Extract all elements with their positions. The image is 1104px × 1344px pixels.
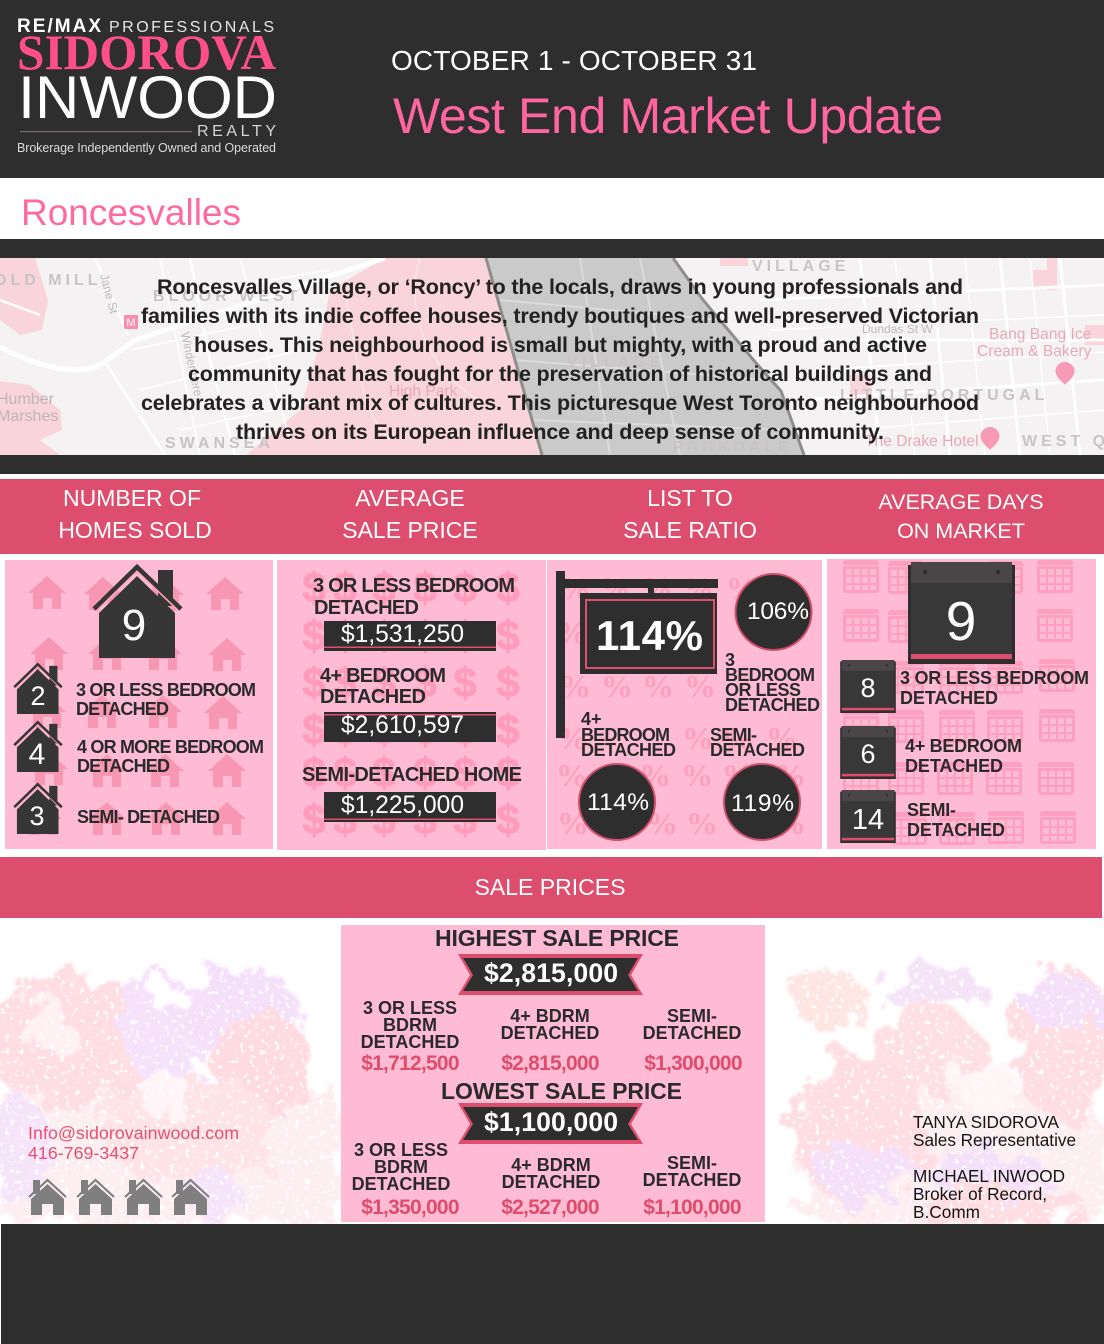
icon: restaurant pin (980, 427, 1000, 450)
stat: 4+ bedroom price: $2,610,597 (341, 712, 464, 739)
date range: OCTOBER 1 - OCTOBER 31 (391, 45, 757, 76)
dark strip above map (0, 239, 1104, 258)
lowest: 4+ bdrm detached: $2,527,000 (501, 1196, 599, 1219)
panel: list to sale ratio: % (559, 668, 591, 704)
contact details (28, 1123, 239, 1163)
lowest: 4+ bdrm detached: DETACHED (502, 1172, 600, 1192)
panel: average sale price: $ (413, 659, 437, 706)
panel: list to sale ratio: % (729, 805, 761, 841)
stat: 119% semi-detached (710, 725, 805, 840)
footer band (1, 1224, 1104, 1344)
highest: 3 or less bdrm detached (361, 998, 459, 1075)
panel: average sale price: $ (496, 706, 520, 753)
logo: Sidorova Inwood Realty: PROFESSIONALS (109, 19, 274, 36)
agent names: TANYA SIDOROVA (913, 1112, 1060, 1132)
stat: 3 or less bedroom days: 8 (860, 673, 876, 703)
highest: 3 or less bdrm detached: DETACHED (361, 1032, 459, 1052)
stat: 4+ bedroom price: 4+ BEDROOM (320, 665, 446, 687)
panel: average sale price: $ (453, 706, 477, 753)
panel: average sale price: $ (372, 749, 396, 796)
sale prices banner (0, 857, 1102, 918)
panel: list to sale ratio: % (646, 805, 678, 841)
stat: 4+ bedroom days: DETACHED (905, 756, 1003, 776)
panel: list to sale ratio: % (722, 757, 754, 793)
stat: 3 or less bedroom detached: 2 (30, 681, 46, 711)
panel: average sale price: $ (453, 564, 477, 611)
highest: semi-detached (643, 1006, 742, 1075)
heading: highest sale price: HIGHEST SALE PRICE (435, 925, 679, 951)
stat: 4+ bedroom days: 4+ BEDROOM (905, 736, 1022, 756)
dark strip below map (0, 455, 1104, 474)
ribbon: lowest price (458, 1103, 643, 1144)
panel: list to sale ratio: % (601, 668, 633, 704)
description text (141, 275, 979, 444)
stat: semi-detached: 3 (29, 801, 45, 831)
lowest: 3 or less bdrm detached: $1,350,000 (361, 1196, 459, 1219)
lowest: semi-detached: SEMI- (667, 1153, 717, 1173)
panel: average sale price: $ (372, 612, 396, 659)
description text: celebrates a vibrant mix of cultures. This picturesque West Toronto neighbourhood (141, 391, 979, 415)
logo: Sidorova Inwood Realty: REALTY (197, 123, 276, 140)
icon: hanging sign with overall ratio: 114% (596, 612, 703, 659)
highest: 4+ bdrm detached: 4+ BDRM (510, 1006, 590, 1026)
panel: list to sale ratio: % (641, 570, 673, 606)
stat: 4+ bedroom days: 6 (860, 739, 876, 769)
stat column headers: AVERAGE (355, 485, 465, 511)
stat: 3 or less bedroom price (313, 575, 515, 651)
map labels: VILLAGE (567, 354, 664, 371)
agent names (913, 1112, 1076, 1222)
lowest: semi-detached (643, 1153, 741, 1219)
stat: 3 or less bedroom days (840, 660, 1089, 713)
icon: calendar total 9 (908, 562, 1015, 664)
stat: 3 or less bedroom price: $1,531,250 (341, 621, 464, 648)
lowest: 3 or less bdrm detached: 3 OR LESS (354, 1140, 448, 1160)
stat column headers: ON MARKET (897, 519, 1025, 543)
stat: 4 or more bedroom detached: DETACHED (77, 756, 170, 776)
icon row: four houses (29, 1180, 209, 1215)
panel: average sale price: $ (302, 659, 326, 706)
panel: list to sale ratio: % (774, 757, 806, 793)
map labels: LITTLE PORTUGAL (840, 387, 1048, 404)
panel: list to sale ratio: % (599, 570, 631, 606)
map labels: Bang Bang Ice (989, 326, 1091, 343)
map labels: High Park (389, 383, 458, 400)
panel: list to sale ratio: % (722, 720, 754, 756)
stat: semi-detached (14, 784, 220, 834)
panel: average sale price: $ (372, 796, 396, 843)
sale prices banner: SALE PRICES (475, 874, 625, 900)
panel: average sale price: $ (302, 796, 326, 843)
contact details: 416-769-3437 (28, 1143, 139, 1163)
stat: 3 or less bedroom price: DETACHED (314, 597, 419, 619)
panel: average sale price: $ (413, 564, 437, 611)
panel: average sale price: $ (372, 706, 396, 753)
panel: list to sale ratio: % (726, 570, 758, 606)
panel: average sale price: $ (333, 749, 357, 796)
stat: 114% 4+ bedroom: 114% (587, 789, 649, 816)
icon: subway marker: M (126, 317, 136, 329)
icon: subway marker (124, 315, 138, 329)
main title: West End Market Update (393, 88, 943, 144)
map labels: Dundas St W (862, 322, 933, 336)
logo: Sidorova Inwood Realty: Brokerage Independently Owned and Operated (17, 141, 276, 155)
panel: list to sale ratio: % (642, 668, 674, 704)
icon: restaurant pin (1056, 362, 1074, 384)
lowest: 4+ bdrm detached (501, 1155, 600, 1219)
panel: map with neighbourhood description (0, 258, 1104, 456)
panel: average sale price: $ (453, 659, 477, 706)
lowest: 4+ bdrm detached: 4+ BDRM (511, 1155, 591, 1175)
stat: 114% 4+ bedroom: BEDROOM (581, 725, 670, 745)
agent names: Sales Representative (913, 1130, 1076, 1150)
highest: 3 or less bdrm detached: $1,712,500 (361, 1052, 459, 1075)
stat column headers: SALE RATIO (623, 517, 757, 543)
icon: house total 9 (94, 567, 181, 658)
panel: list to sale ratio: % (556, 614, 588, 650)
panel: list to sale ratio: % (597, 757, 629, 793)
lowest: 3 or less bdrm detached: DETACHED (352, 1174, 450, 1194)
stat: semi-detached days (840, 790, 1005, 843)
panel: average sale price: $ (453, 796, 477, 843)
panel: average sale price: $ (302, 749, 326, 796)
stat: 106% 3 bedroom or less: 106% (747, 598, 809, 625)
lowest: 3 or less bdrm detached (352, 1140, 459, 1219)
lowest: semi-detached: $1,100,000 (643, 1196, 741, 1219)
logo: Sidorova Inwood Realty (17, 16, 277, 155)
panel: average sale price: $ (302, 612, 326, 659)
paint splatter background left (0, 968, 340, 1224)
stat: semi-detached price (302, 764, 522, 822)
highest: 4+ bdrm detached (501, 1006, 599, 1075)
stat: semi-detached price: $1,225,000 (341, 792, 464, 819)
highest: semi-detached: $1,300,000 (644, 1052, 742, 1075)
panel: list to sale ratio: % (639, 757, 671, 793)
stat: 3 or less bedroom price: 3 OR LESS BEDROOM (313, 575, 515, 597)
stat: 114% 4+ bedroom: DETACHED (581, 740, 676, 760)
stat column headers: AVERAGE DAYS (878, 490, 1044, 514)
panel: list to sale ratio: % (766, 720, 798, 756)
panel: list to sale ratio (547, 560, 822, 849)
stat: 119% semi-detached: DETACHED (710, 740, 805, 760)
panel: average sale price: $ (333, 659, 357, 706)
panel: highest and lowest sale prices (341, 925, 765, 1222)
agent names: MICHAEL INWOOD (913, 1166, 1065, 1186)
map labels: Cream & Bakery (977, 343, 1092, 360)
panel: average sale price: $ (496, 564, 520, 611)
panel: list to sale ratio: % (681, 757, 713, 793)
stat: semi-detached days: DETACHED (907, 820, 1005, 840)
icon: hanging sign with overall ratio (556, 571, 718, 738)
description text: families with its indie coffee houses, trendy boutiques and well-preserved Victorian (141, 304, 979, 328)
stat: 106% 3 bedroom or less: 3 (725, 650, 735, 670)
stat: 106% 3 bedroom or less: OR LESS (725, 680, 801, 700)
logo: Sidorova Inwood Realty: INWOOD (18, 64, 277, 131)
panel: average sale price (277, 560, 546, 850)
stat: 106% 3 bedroom or less (725, 574, 820, 715)
stat column headers (0, 479, 1104, 554)
panel: average sale price: $ (413, 612, 437, 659)
stat: 4 or more bedroom detached (14, 722, 264, 776)
stat: semi-detached: SEMI- DETACHED (77, 807, 220, 827)
panel: average sale price: $ (496, 612, 520, 659)
stat: 114% 4+ bedroom (579, 709, 676, 840)
description text: Roncesvalles Village, or ‘Roncy’ to the locals, draws in young professionals and (157, 275, 963, 299)
icon: house total 9: 9 (122, 601, 146, 650)
map labels: Windermere (178, 331, 205, 398)
description text: community that has fought for the preservation of historical buildings and (188, 362, 932, 386)
panel: average sale price: $ (372, 659, 396, 706)
agent names: B.Comm (913, 1202, 980, 1222)
panel: list to sale ratio: % (559, 570, 591, 606)
stat column headers: SALE PRICE (342, 517, 478, 543)
stat: 119% semi-detached: SEMI- (710, 725, 757, 745)
map labels: SWANSEA (165, 435, 274, 452)
ribbon: highest price (458, 954, 643, 995)
stat: 4+ bedroom price (320, 665, 496, 742)
stat: 106% 3 bedroom or less: BEDROOM (725, 665, 815, 685)
stat column headers: HOMES SOLD (58, 517, 212, 543)
map labels: Jane St (97, 272, 121, 316)
panel: average sale price: $ (496, 659, 520, 706)
stat: semi-detached days: 14 (852, 804, 884, 836)
panel: list to sale ratio: % (682, 570, 714, 606)
panel: list to sale ratio: % (774, 805, 806, 841)
icon: calendar total 9: 9 (946, 590, 976, 652)
stat: semi-detached days: SEMI- (907, 800, 956, 820)
panel: average sale price: $ (496, 796, 520, 843)
panel: average sale price: $ (453, 749, 477, 796)
panel: average sale price: $ (333, 564, 357, 611)
highest: 4+ bdrm detached: DETACHED (501, 1023, 599, 1043)
panel: average sale price: $ (413, 796, 437, 843)
stat: 4 or more bedroom detached: 4 (29, 738, 45, 771)
highest: 4+ bdrm detached: $2,815,000 (501, 1052, 599, 1075)
stat: 3 or less bedroom detached (14, 664, 256, 719)
logo: Sidorova Inwood Realty: RE/MAX (17, 16, 101, 37)
panel: average sale price: $ (453, 612, 477, 659)
panel: average days on market (827, 559, 1096, 849)
stat column headers: LIST TO (647, 485, 733, 511)
neighbourhood heading: Roncesvalles (21, 192, 241, 233)
highest: semi-detached: SEMI- (667, 1006, 717, 1026)
highest: semi-detached: DETACHED (643, 1023, 741, 1043)
panel: average sale price: $ (372, 564, 396, 611)
ribbon: lowest price: $1,100,000 (484, 1107, 618, 1137)
stat: 3 or less bedroom days: DETACHED (900, 688, 998, 708)
panel: average sale price: $ (496, 749, 520, 796)
highest: 3 or less bdrm detached: BDRM (383, 1015, 437, 1035)
description text: houses. This neighbourhood is small but mighty, with a proud and active (194, 333, 927, 357)
stat: 3 or less bedroom detached: 3 OR LESS BEDROOM (76, 680, 256, 700)
ribbon: highest price: $2,815,000 (484, 958, 618, 988)
map labels (0, 258, 1104, 456)
map labels: PARKDALE (673, 439, 793, 456)
panel: average sale price: $ (333, 612, 357, 659)
stat: 106% 3 bedroom or less: DETACHED (725, 695, 820, 715)
panel: average sale price: $ (302, 706, 326, 753)
stat: 4+ bedroom price: DETACHED (320, 686, 426, 708)
panel: average sale price: $ (413, 749, 437, 796)
stat: 3 or less bedroom detached: DETACHED (76, 699, 169, 719)
panel: list to sale ratio: % (556, 720, 588, 756)
map labels: VILLAGE (752, 258, 849, 275)
stat: semi-detached price: SEMI-DETACHED HOME (302, 764, 522, 786)
stat: 119% semi-detached: 119% (731, 790, 794, 817)
stat: 114% 4+ bedroom: 4+ (581, 709, 602, 729)
stat: 4 or more bedroom detached: 4 OR MORE BEDROOM (77, 737, 264, 757)
panel: average sale price: $ (333, 796, 357, 843)
stat: 4+ bedroom days (840, 726, 1022, 779)
panel: list to sale ratio: % (682, 720, 714, 756)
lowest: semi-detached: DETACHED (643, 1170, 741, 1190)
panel: list to sale ratio: % (686, 805, 718, 841)
panel: list to sale ratio: % (556, 757, 588, 793)
header band (0, 0, 1104, 178)
panel: average sale price: $ (413, 706, 437, 753)
panel: list to sale ratio: % (557, 805, 589, 841)
heading: lowest sale price: LOWEST SALE PRICE (441, 1078, 682, 1104)
panel: average sale price: $ (302, 564, 326, 611)
paint splatter background right (794, 963, 1104, 1227)
panel: number of homes sold (5, 560, 273, 849)
description text: thrives on its European influence and deep sense of community. (236, 420, 884, 444)
stat column headers: NUMBER OF (63, 485, 201, 511)
map labels: BLOOR WEST (153, 288, 301, 305)
logo: Sidorova Inwood Realty: SIDOROVA (17, 24, 276, 80)
map labels: The Drake Hotel (865, 433, 979, 450)
lowest: 3 or less bdrm detached: BDRM (374, 1157, 428, 1177)
stat: 3 or less bedroom days: 3 OR LESS BEDROOM (900, 668, 1089, 688)
highest: 3 or less bdrm detached: 3 OR LESS (363, 998, 457, 1018)
panel: average sale price: $ (333, 706, 357, 753)
agent names: Broker of Record, (913, 1184, 1047, 1204)
contact details: Info@sidorovainwood.com (28, 1123, 239, 1143)
panel: list to sale ratio: % (684, 668, 716, 704)
gray neighbourhood highlight (486, 258, 804, 455)
